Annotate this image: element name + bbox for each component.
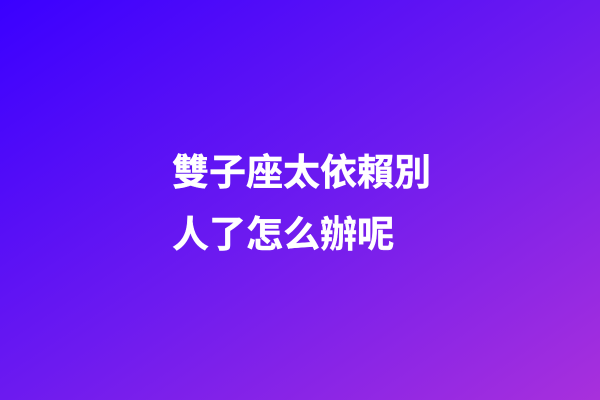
title bbox=[172, 152, 431, 255]
title line 2: 人了怎么辦呢 bbox=[172, 214, 394, 255]
title line 1: 雙子座太依賴別 bbox=[172, 152, 431, 193]
